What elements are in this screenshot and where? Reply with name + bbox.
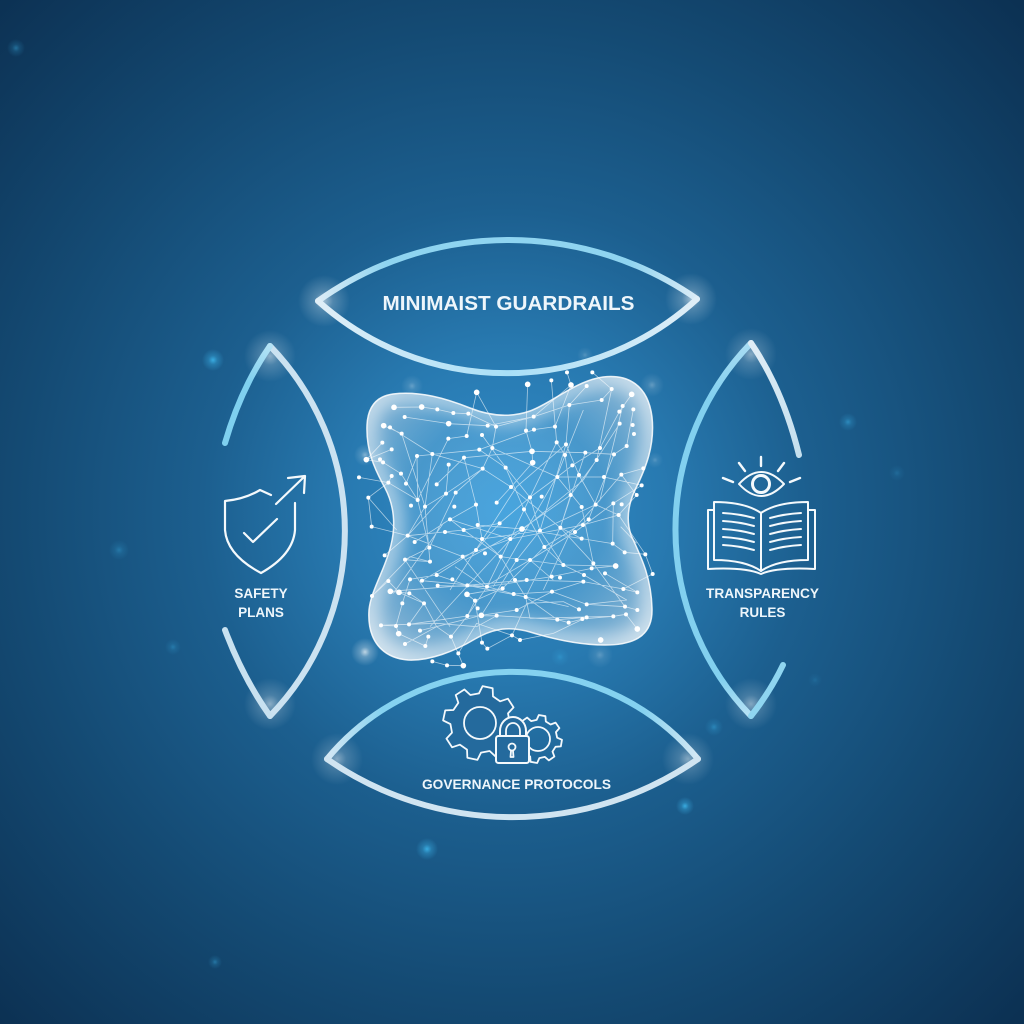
label: transparency rules: RULES [740, 605, 785, 620]
network nodes: small [359, 372, 653, 665]
blob inner edge glow [367, 377, 653, 660]
icon: eye above open book [708, 457, 815, 574]
label: governance protocols: GOVERNANCE PROTOCOLS [422, 776, 611, 792]
panel: governance protocols (bottom lens) [311, 672, 714, 817]
label: safety plans: SAFETY [234, 586, 288, 601]
label: transparency rules: TRANSPARENCY [706, 586, 819, 601]
label: safety plans: PLANS [238, 605, 284, 620]
blob membrane [367, 377, 653, 660]
panel: minimalist guardrails (top lens) [298, 240, 717, 373]
icon: gears with padlock [437, 680, 566, 767]
panel: safety plans (left lens) [225, 330, 345, 730]
heading: minimalist guardrails: MINIMAIST GUARDRAILS [382, 293, 634, 315]
floating light particles [7, 39, 905, 969]
icon: shield with check and arrow [225, 476, 305, 573]
panel: transparency rules (right lens) [675, 328, 819, 730]
network nodes: large [366, 384, 637, 666]
central neural network blob [359, 372, 653, 666]
network links [359, 372, 653, 666]
